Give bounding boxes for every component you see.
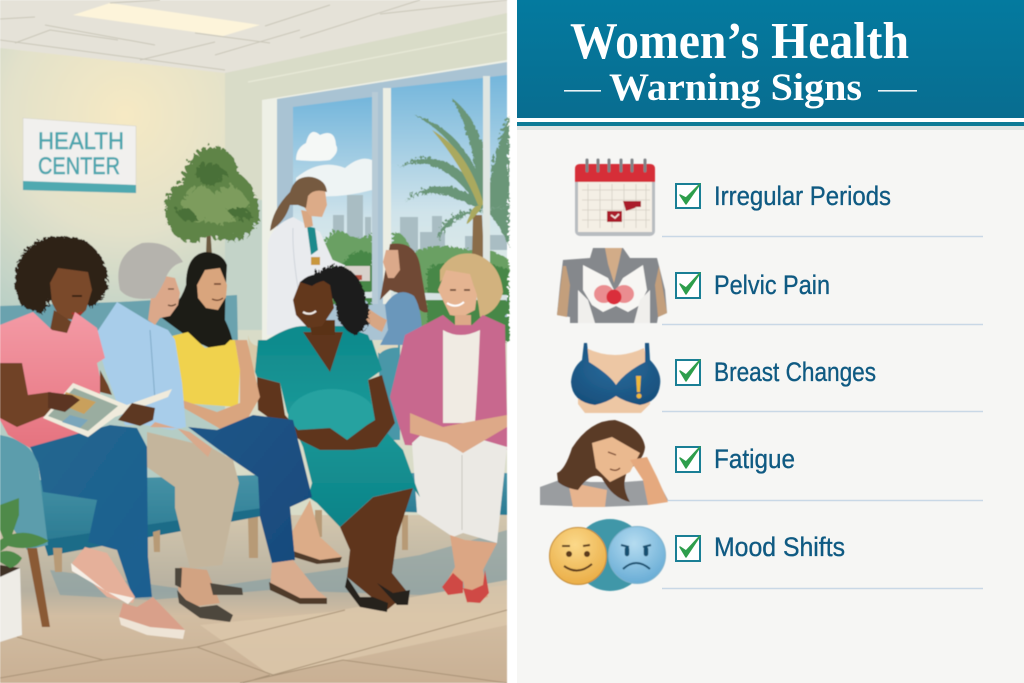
- row: mood shifts: [550, 519, 845, 591]
- woman 3: black hair, yellow top: [158, 252, 342, 604]
- clouds: [296, 132, 337, 161]
- sign: Health Center: HEALTH: [38, 128, 124, 155]
- woman 2: grey hair, blue shirt: [95, 243, 243, 622]
- sign: Health Center: CENTER: [38, 153, 120, 180]
- title line 2: Warning Signs: [609, 66, 862, 109]
- icon: mood faces: [550, 519, 666, 591]
- right wall: [225, 13, 507, 520]
- woman 4: pregnant, teal dress: [255, 264, 420, 612]
- panel background: [517, 122, 1024, 683]
- icon: pelvis on torso: [557, 248, 667, 323]
- icon: tired woman: [540, 420, 668, 507]
- label: Mood Shifts: [714, 532, 845, 562]
- seating: chair backs: [0, 295, 238, 345]
- icon: calendar: [575, 160, 655, 236]
- woman 1: pink shirt, reading: [0, 234, 185, 639]
- window: [262, 60, 507, 340]
- row: pelvic pain: [557, 248, 830, 323]
- trees outside: [318, 229, 507, 340]
- panel: warning signs: [517, 0, 1024, 683]
- checkbox: [676, 447, 700, 472]
- potted plant: [0, 498, 49, 642]
- row: irregular periods: [575, 160, 891, 236]
- doctor: [267, 177, 344, 335]
- row: fatigue: [540, 420, 795, 507]
- label: Breast Changes: [714, 357, 876, 387]
- label: Pelvic Pain: [714, 270, 830, 300]
- bench seat: [0, 335, 507, 627]
- checkbox: [676, 273, 700, 298]
- panel: waiting room illustration: [0, 0, 507, 683]
- row: breast changes: [571, 343, 876, 413]
- checkbox: [676, 184, 700, 208]
- label: Fatigue: [714, 444, 795, 474]
- header band: [517, 0, 1024, 126]
- icon: bra with exclamation: [571, 343, 660, 413]
- checkbox: [676, 536, 700, 561]
- floor: [0, 515, 507, 683]
- divider lines: [662, 236, 983, 588]
- magazine: [43, 383, 172, 437]
- checkbox: [676, 360, 700, 385]
- palm tree: [397, 96, 507, 258]
- ceiling: [0, 0, 507, 90]
- back wall: [0, 48, 225, 520]
- woman 5: blonde hair, pink cardigan: [390, 253, 507, 603]
- potted tree: [162, 143, 256, 255]
- sign: Health Center: [23, 118, 136, 193]
- label: Irregular Periods: [714, 181, 891, 211]
- skyline: [333, 195, 507, 252]
- title line 1: Women’s Health: [570, 13, 909, 70]
- girl in background: [345, 243, 428, 345]
